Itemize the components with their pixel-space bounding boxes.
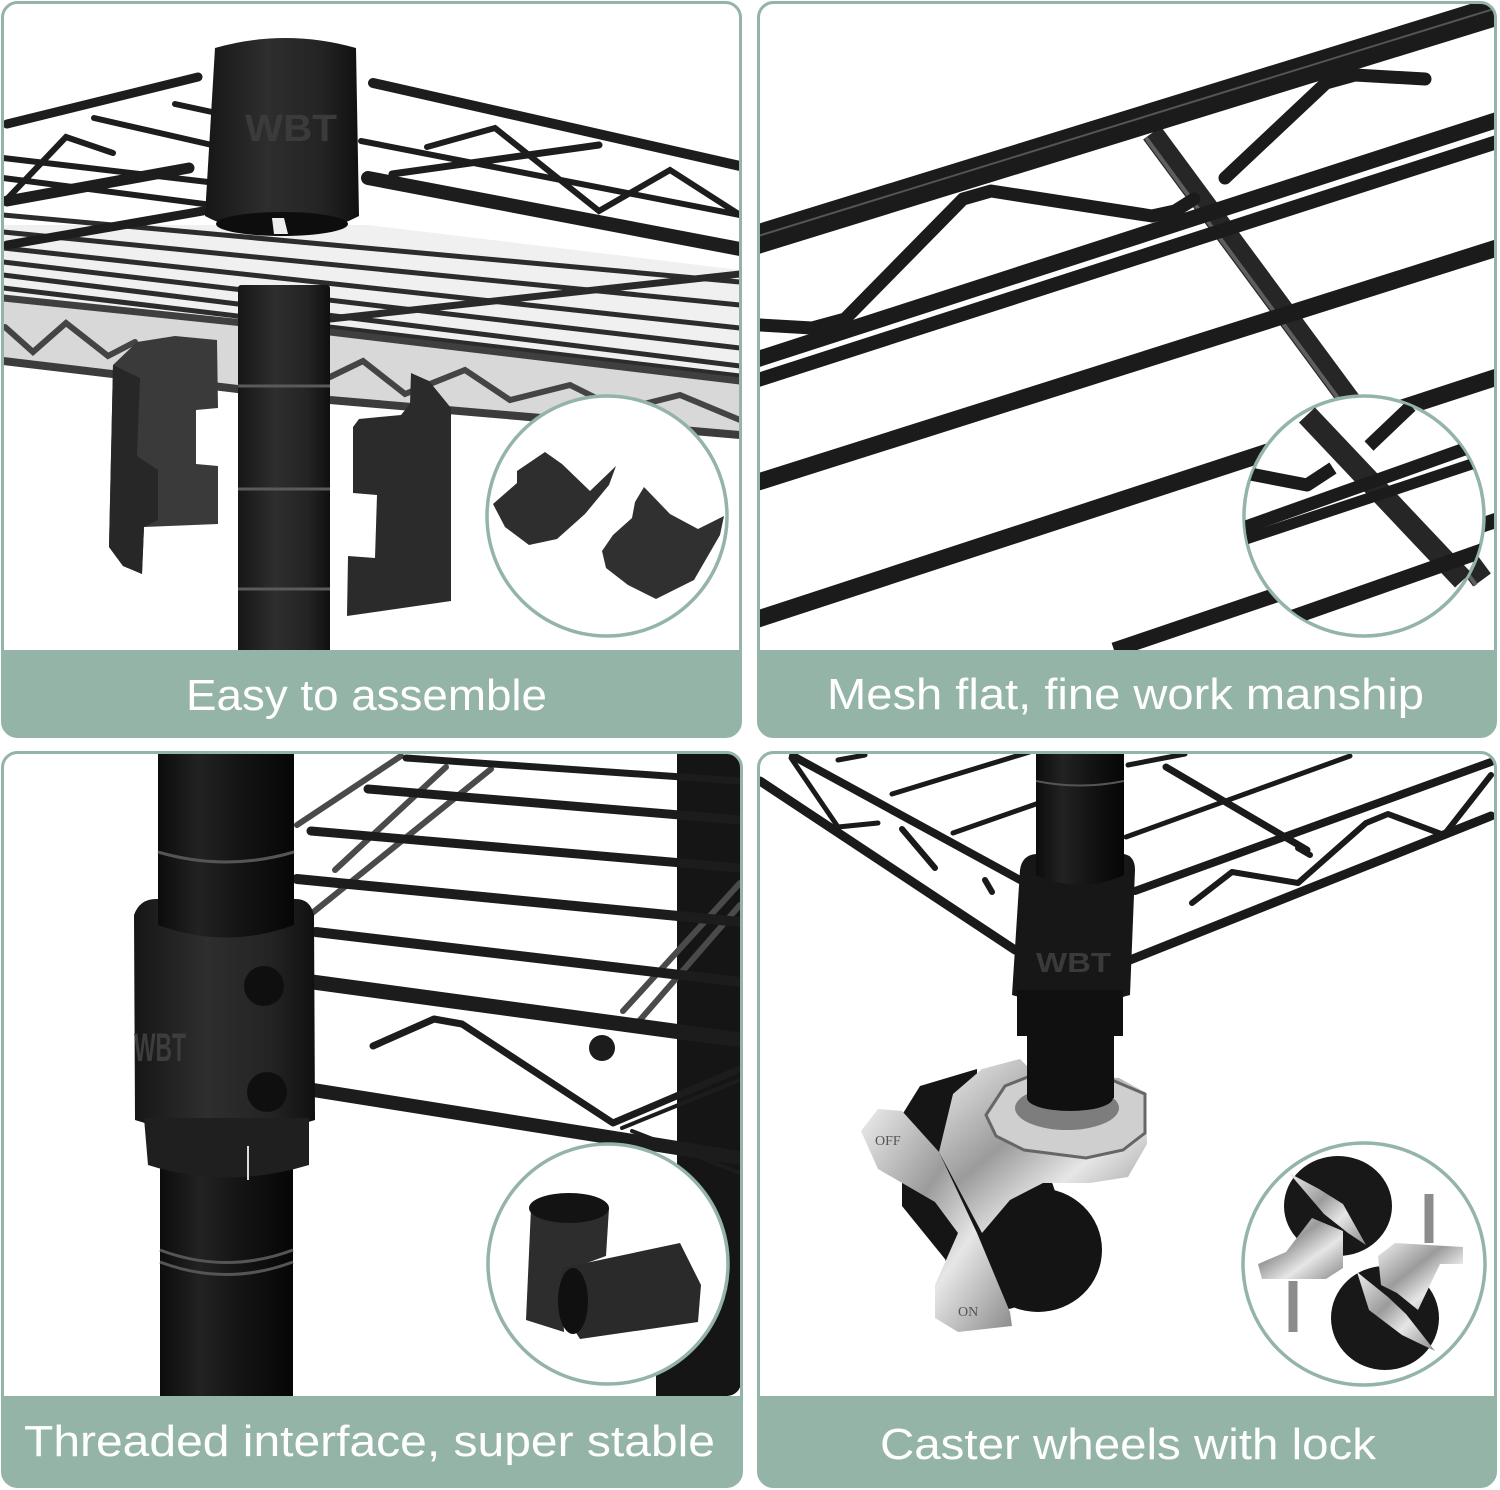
lock label OFF: OFF (875, 1134, 901, 1149)
left clip (109, 336, 218, 574)
caption text: Threaded interface, super stable (24, 1417, 715, 1466)
shelf mesh (3, 77, 740, 435)
top connector sleeve (205, 38, 359, 236)
inset circle: clips (487, 396, 727, 636)
inset circle: sleeves (488, 1144, 728, 1384)
cross bar (1152, 133, 1482, 580)
front pole (158, 753, 294, 1396)
WBT logo text: WBT (245, 108, 337, 150)
lock label ON: ON (958, 1305, 978, 1320)
right clip (347, 373, 451, 616)
panel: threaded interface (2, 752, 742, 1487)
WBT logo text: WBT (1036, 947, 1111, 978)
panel frame (2, 752, 742, 1486)
caption band (2, 1396, 742, 1487)
WBT logo text: WBT (134, 1026, 186, 1070)
zigzag wires (760, 75, 1425, 328)
caption band (758, 650, 1496, 737)
panel: caster wheels (758, 750, 1496, 1487)
shelf wires (760, 750, 1491, 960)
pole (238, 285, 330, 655)
photo: shelf corner and clips (3, 3, 740, 655)
pole and collar (1012, 754, 1135, 1040)
caption text: Caster wheels with lock (880, 1420, 1377, 1469)
long wires (755, 7, 1500, 650)
caption band (2, 650, 741, 737)
caption text: Easy to assemble (186, 671, 547, 720)
threaded collar (134, 899, 315, 1180)
inset circle: casters (1243, 1143, 1485, 1385)
photo: pole and collar (134, 754, 740, 1396)
caption text: Mesh flat, fine work manship (827, 670, 1424, 719)
inset circle: mesh detail (1240, 396, 1490, 636)
rivet (589, 1035, 615, 1061)
panel frame (2, 2, 740, 736)
photo: mesh close-up (755, 3, 1500, 650)
panel frame (758, 752, 1496, 1486)
rear pole (656, 753, 741, 1396)
shelf wires (283, 756, 740, 1173)
caster wheel (861, 1040, 1147, 1332)
panel: mesh flat (755, 2, 1500, 737)
panel: easy to assemble (2, 2, 741, 737)
caption band (758, 1396, 1496, 1487)
panel frame (758, 2, 1496, 736)
photo: caster and shelf (759, 750, 1495, 1396)
